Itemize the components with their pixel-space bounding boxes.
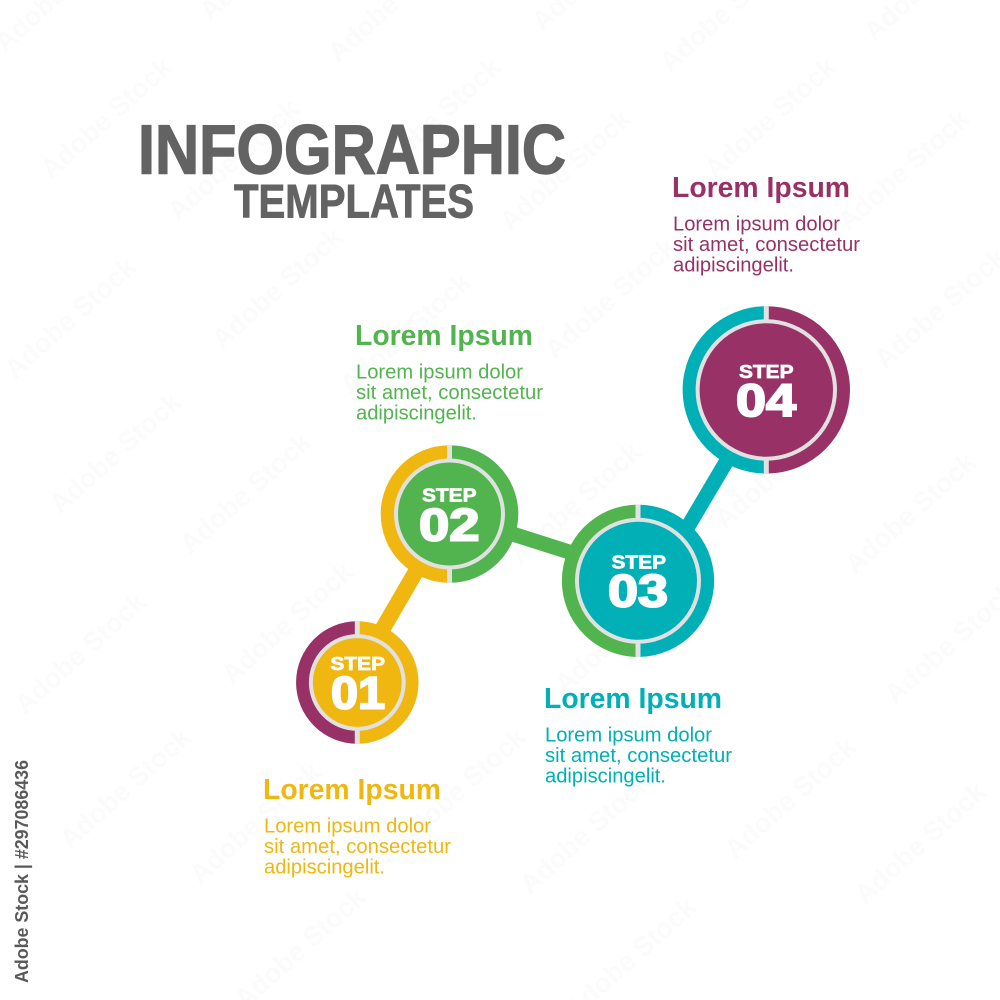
text block: step 4: sit amet, consectetur [673,234,860,256]
step 3 circle: STEP [612,552,666,572]
connector: step 2 to step 3 [500,530,585,557]
step 2 circle: STEP [422,484,476,506]
text block: step 4: Lorem ipsum dolor [673,214,840,236]
watermark pattern: Adobe Stock [719,731,862,864]
text block: step 2: adipiscingelit. [356,402,477,424]
connector: step 1 to step 2 [375,556,425,642]
watermark pattern: Adobe Stock [849,776,992,909]
watermark pattern: Adobe Stock [839,446,982,579]
text block: step 3: adipiscingelit. [545,766,666,788]
text block: step 4: Lorem Ipsum [672,171,850,203]
watermark pattern: Adobe Stock [709,401,852,534]
title: TEMPLATES [234,174,474,228]
watermark pattern: Adobe Stock [832,103,975,236]
step 4 circle [683,306,850,474]
title [138,110,566,228]
watermark pattern: Adobe Stock [216,556,359,689]
text block: step 3 [544,682,732,788]
connector: step 3 to step 4 [680,447,735,540]
stock id side label: Adobe Stock | #297086436 [11,760,32,983]
step 1 circle [296,621,419,744]
title: INFOGRAPHIC [138,110,566,188]
step 3 circle [562,504,714,657]
watermark pattern: Adobe Stock [699,51,842,184]
watermark pattern: Adobe Stock [364,51,507,184]
step 1 circle: 01 [331,668,385,718]
text block: step 1: sit amet, consectetur [264,836,451,858]
text block: step 1: adipiscingelit. [264,856,385,878]
watermark pattern: Adobe Stock [494,103,637,236]
step 4 circle: 04 [736,375,796,426]
watermark pattern: Adobe Stock [0,251,142,384]
watermark pattern: Adobe Stock [514,766,657,899]
step 1 circle: STEP [330,653,385,674]
watermark pattern: Adobe Stock [334,266,477,399]
watermark pattern: Adobe Stock [174,426,317,559]
watermark pattern: Adobe Stock [9,586,152,719]
text block: step 1: Lorem ipsum dolor [264,816,431,838]
text block: step 2 [355,319,543,424]
watermark pattern: Adobe Stock [44,386,187,519]
watermark pattern: Adobe Stock [54,721,197,854]
text block: step 1: Lorem Ipsum [263,773,441,805]
watermark pattern: Adobe Stock [549,566,692,699]
text block: step 3: sit amet, consectetur [545,745,732,767]
watermark pattern: Adobe Stock [539,231,682,364]
watermark pattern: Adobe Stock [389,721,532,854]
text block: step 3: Lorem ipsum dolor [545,724,712,746]
step 4 circle: STEP [739,361,794,382]
step 2 circle [381,445,518,583]
text block: step 2: Lorem ipsum dolor [356,362,523,384]
text block: step 2: Lorem Ipsum [355,319,533,351]
watermark pattern: Adobe Stock [504,436,647,569]
text block: step 4: adipiscingelit. [673,254,794,276]
watermark pattern: Adobe Stock [184,756,327,889]
step 3 circle: 03 [608,566,668,616]
watermark pattern: Adobe Stock [35,51,178,184]
step 2 circle: 02 [419,500,480,550]
text block: step 3: Lorem Ipsum [544,682,722,714]
watermark pattern: Adobe Stock [162,93,305,226]
text block: step 2: sit amet, consectetur [356,382,543,404]
watermark pattern: Adobe Stock [206,221,349,354]
text block: step 1 [263,773,451,878]
text block: step 4 [672,171,860,276]
